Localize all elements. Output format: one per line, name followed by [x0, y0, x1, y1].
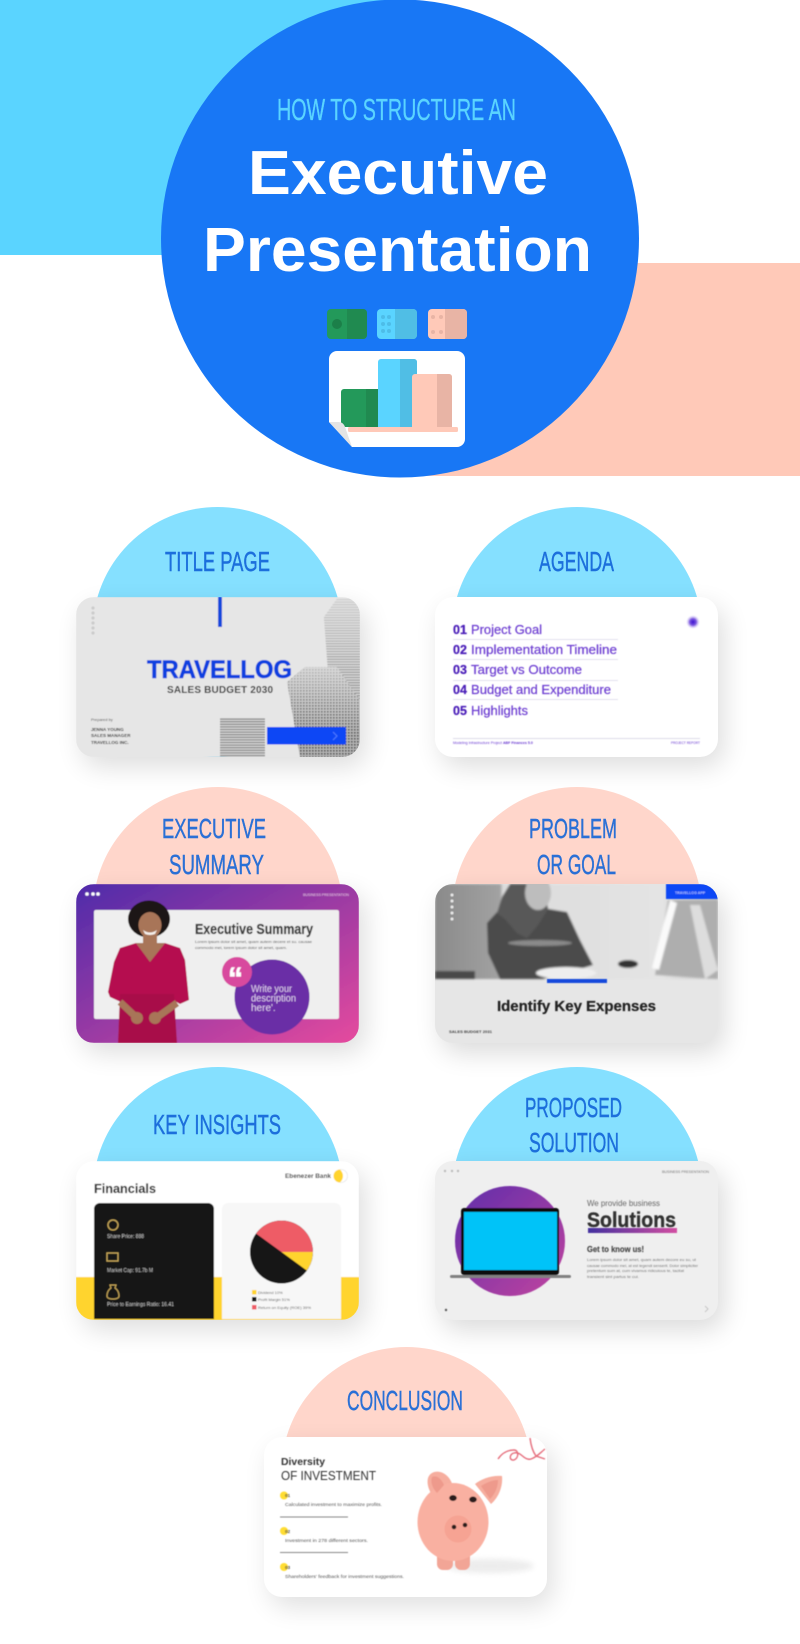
slide: executive summary: here'. [251, 1003, 276, 1014]
slide: agenda list: 03 [453, 663, 467, 677]
label: proposed solution: PROPOSED [525, 1092, 622, 1123]
slide: identify key expenses [435, 876, 718, 1043]
slide: executive summary: commodo mei, lorem ipsum dolor sit amet, quam. [195, 946, 287, 950]
slide: solutions: BUSINESS PRESENTATION [662, 1170, 710, 1174]
card shadow [82, 1171, 365, 1330]
slide: agenda list: Project Goal [471, 623, 542, 637]
slide: diversity of investment: Calculated investment to maximize profits. [285, 1502, 382, 1507]
card shadow [441, 1171, 724, 1330]
slide: solutions [435, 1161, 718, 1320]
slide: travellog title [76, 597, 360, 757]
label: executive summary: EXECUTIVE [162, 813, 266, 844]
semicircle: problem or goal [452, 787, 702, 1037]
slide: diversity of investment [264, 1437, 547, 1597]
slide: executive summary: BUSINESS PRESENTATION [303, 893, 350, 897]
slide: agenda list: PROJECT REPORT [671, 741, 700, 745]
slide: solutions: pretentum sum at, cum vivamus ridiculous te, tacitat [587, 1268, 685, 1273]
section: proposed solution [435, 1067, 724, 1330]
slide: financials: Return on Equity (ROE) 39% [258, 1305, 311, 1310]
header background: cyan block [0, 0, 400, 255]
slide: identify key expenses: TRAVELLOG APP [675, 891, 706, 895]
semicircle: conclusion [282, 1347, 532, 1597]
label: key insights: KEY INSIGHTS [153, 1109, 281, 1140]
slide: agenda list: 02 [453, 643, 467, 657]
slide: solutions: Solutions [587, 1209, 676, 1232]
slide: travellog title: SALES MANAGER [91, 733, 131, 738]
slide: financials: Share Price: 888 [107, 1234, 144, 1240]
photo: woman at computer [435, 876, 718, 979]
card shadow [270, 1447, 553, 1607]
section: conclusion [264, 1347, 553, 1607]
section: problem or goal [435, 787, 724, 1053]
semicircle: agenda [452, 507, 702, 757]
slide: travellog title: TRAVELLOG INC. [91, 740, 129, 745]
label: problem or goal [529, 813, 617, 880]
label: problem or goal: OR GOAL [537, 849, 616, 880]
decorative scribble [498, 1438, 545, 1460]
slide: financials: Price to Earnings Ratio: 16.41 [107, 1302, 174, 1308]
label: problem or goal: PROBLEM [529, 813, 617, 844]
slide: financials: Dividend 10% [258, 1290, 283, 1295]
slide: identify key expenses: SALES BUDGET 2031 [449, 1030, 492, 1034]
slide: travellog title: SALES BUDGET 2030 [167, 685, 273, 696]
main title [203, 139, 592, 285]
section: key insights [76, 1067, 365, 1330]
slide: identify key expenses: Identify Key Expenses [497, 998, 656, 1015]
icon: three blocks [327, 309, 467, 339]
slide: agenda list: Target vs Outcome [471, 663, 582, 677]
slide: financials: Ebenezer Bank [285, 1173, 332, 1180]
card shadow [82, 607, 366, 767]
slide: executive summary: Executive Summary [195, 921, 314, 938]
slide: travellog title: Prepared by [91, 717, 113, 722]
section: agenda [435, 507, 724, 767]
slide: solutions: Lorem ipsum dolor sit amet, quam autem decore eu su, ut [587, 1257, 697, 1262]
slide: agenda list: 04 [453, 683, 467, 697]
slide: agenda list: 01 [453, 623, 467, 637]
eyebrow heading: HOW TO STRUCTURE AN [277, 92, 516, 127]
label: proposed solution: SOLUTION [529, 1127, 619, 1158]
label: executive summary [162, 813, 266, 880]
slide: diversity of investment: 01 [285, 1493, 291, 1498]
slide: solutions: causae commodo mei, at est legendi senserit. Dolor simpliciter [587, 1263, 699, 1268]
slide: agenda list: Budget and Expenditure [471, 683, 611, 697]
label: conclusion: CONCLUSION [347, 1385, 463, 1416]
slide: financials: Market Cap: 91.7b M [107, 1268, 153, 1274]
label: proposed solution [525, 1092, 622, 1158]
slide: financials: Financials [94, 1181, 156, 1196]
slide: solutions: Get to know us! [587, 1244, 644, 1254]
semicircle: proposed solution [452, 1067, 702, 1317]
semicircle: title page [92, 507, 342, 757]
card shadow [441, 894, 724, 1053]
slide: executive summary: Lorem ipsum dolor sit amet, quam autem decere et su. causae [195, 940, 312, 944]
slide: diversity of investment: Shareholders' feedback for investment suggestions. [285, 1574, 404, 1579]
slide: agenda list [435, 597, 718, 757]
label: executive summary: SUMMARY [169, 849, 264, 880]
card shadow [82, 894, 365, 1053]
slide: executive summary: “ [228, 962, 243, 995]
slide: executive summary: Write your [251, 984, 293, 995]
main title: Executive [248, 139, 548, 208]
label: title page: TITLE PAGE [165, 546, 270, 577]
slide: travellog title: JENNA YOUNG [91, 727, 124, 732]
slide: diversity of investment: 02 [285, 1529, 291, 1534]
slide: agenda list: Implementation Timeline [471, 643, 617, 657]
slide: solutions: transient sint partus te cui. [587, 1274, 639, 1279]
slide: agenda list: Highlights [471, 704, 528, 718]
card shadow [441, 607, 724, 767]
slide: travellog title: TRAVELLOG [147, 656, 292, 684]
slide: diversity of investment: Investment in 278 different sectors. [285, 1538, 368, 1543]
slide: diversity of investment: OF INVESTMENT [281, 1468, 376, 1483]
semicircle: key insights [93, 1067, 343, 1317]
slide: agenda list: Modeling Infrastructure Project ABF Finances 5.0 [453, 741, 533, 745]
slide: financials: Profit Margin 51% [258, 1297, 290, 1302]
semicircle: executive summary [93, 787, 343, 1037]
slide: executive summary [76, 884, 359, 1043]
slide: diversity of investment: 03 [285, 1565, 291, 1570]
main title: Presentation [203, 216, 592, 285]
header circle [161, 0, 639, 478]
slide: executive summary: description [251, 994, 296, 1004]
section: title page [76, 507, 366, 767]
slide: solutions: We provide business [587, 1199, 660, 1208]
woman in magenta [108, 900, 189, 1043]
label: agenda: AGENDA [539, 546, 614, 577]
section: executive summary [76, 787, 365, 1053]
slide: agenda list: 05 [453, 704, 467, 718]
icon: bar chart on paper [329, 351, 465, 447]
piggy bank [418, 1472, 534, 1573]
slide: diversity of investment: Diversity [281, 1456, 325, 1468]
slide: financials [76, 1161, 359, 1320]
header background: peach block [400, 263, 800, 476]
